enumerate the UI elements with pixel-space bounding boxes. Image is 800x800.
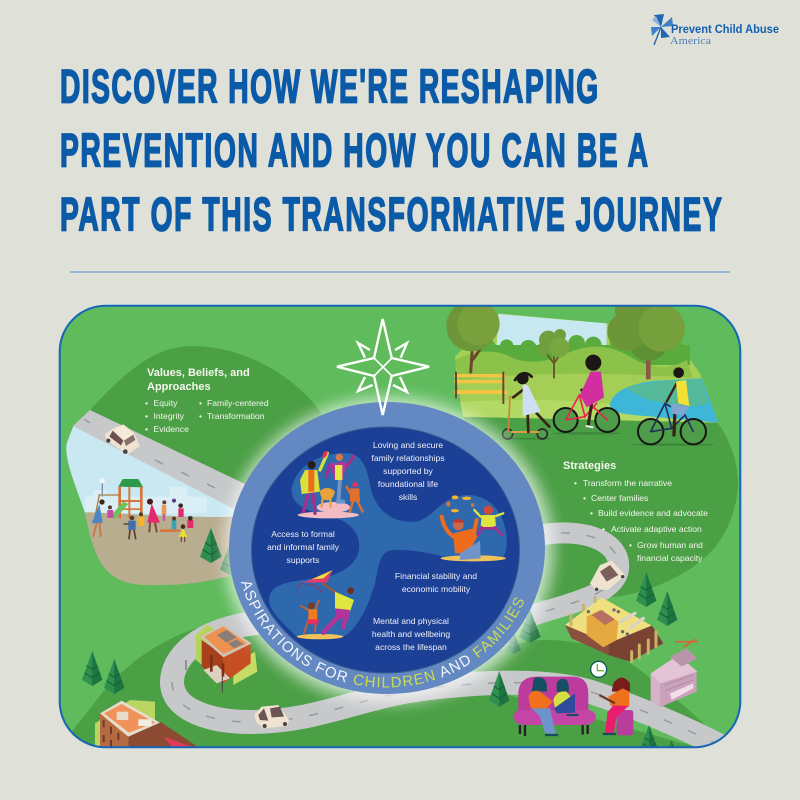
logo: Prevent Child Abuse America: Prevent Child Abuse bbox=[671, 23, 780, 36]
text: values, beliefs, and approaches bbox=[145, 367, 269, 434]
text: values, beliefs, and approaches: Approaches bbox=[147, 381, 211, 393]
icon: compass star bbox=[337, 319, 429, 415]
text: family supports bbox=[267, 529, 340, 565]
text: loving relationships: family relationships bbox=[371, 453, 445, 463]
icon: car on lower road bbox=[254, 705, 289, 728]
text: values, beliefs, and approaches: • bbox=[145, 424, 148, 434]
icon: hospital complex bbox=[565, 597, 663, 662]
inner circle bbox=[252, 427, 520, 673]
pond bbox=[610, 378, 718, 423]
mother and child with leaves bbox=[441, 495, 506, 561]
panel: values blob bbox=[90, 346, 322, 484]
people on sofa bbox=[513, 661, 633, 736]
text: loving relationships: foundational life bbox=[378, 479, 438, 489]
title: PART OF THIS TRANSFORMATIVE JOURNEY bbox=[60, 189, 722, 241]
text: strategies: • bbox=[590, 508, 593, 518]
text: strategies: Transform the narrative bbox=[583, 478, 672, 488]
icon: pinwheel bbox=[651, 14, 673, 45]
girl on scooter bbox=[503, 372, 549, 439]
icon: car on right road bbox=[590, 561, 625, 591]
text: health bbox=[372, 616, 450, 652]
children and adults bbox=[92, 499, 193, 542]
icon: bottom left apartments bbox=[95, 700, 200, 750]
play structure bbox=[95, 478, 143, 519]
panel: journey map bbox=[59, 292, 741, 760]
text: strategies bbox=[563, 460, 708, 563]
icon: pink tower with helicopter bbox=[651, 639, 698, 707]
ground bbox=[85, 512, 233, 585]
panel: lower green hills bbox=[59, 618, 705, 748]
text: family supports: Access to formal bbox=[271, 529, 335, 539]
text: family supports: and informal family bbox=[267, 542, 340, 552]
icon: red civic building bbox=[186, 624, 257, 693]
bushes bbox=[477, 333, 690, 365]
scene: park bbox=[446, 292, 718, 446]
text: health: health and wellbeing bbox=[372, 629, 450, 639]
panel: strategies blob bbox=[463, 417, 738, 600]
outer ring bbox=[229, 402, 545, 694]
woman on pink bike bbox=[554, 355, 619, 432]
text: values, beliefs, and approaches: Evidence bbox=[154, 424, 189, 434]
ring label: ASPIRATIONS FOR CHILDREN AND FAMILIES bbox=[240, 582, 524, 688]
bench bbox=[454, 372, 508, 404]
text: values, beliefs, and approaches: • bbox=[145, 411, 148, 421]
title bbox=[60, 61, 722, 241]
text: financial stability: Financial stability and bbox=[395, 571, 477, 581]
park ground and sky bbox=[455, 313, 718, 423]
trees bbox=[82, 528, 678, 760]
text: strategies: Grow human and bbox=[637, 540, 703, 550]
text: health: Mental and physical bbox=[373, 616, 449, 626]
text: strategies: Strategies bbox=[563, 460, 616, 472]
icon: clock bbox=[591, 661, 607, 677]
woman in orange bbox=[528, 677, 558, 735]
text: loving relationships: Loving and secure bbox=[373, 440, 443, 450]
text: values, beliefs, and approaches: Family-centered bbox=[207, 398, 269, 408]
woman in yellow bbox=[553, 679, 578, 715]
title: PREVENTION AND HOW YOU CAN BE A bbox=[60, 125, 648, 177]
text: values, beliefs, and approaches: • bbox=[199, 398, 202, 408]
text: strategies: Center families bbox=[591, 493, 648, 503]
text: strategies: Build evidence and advocate bbox=[598, 508, 708, 518]
title: DISCOVER HOW WE'RE RESHAPING bbox=[60, 61, 598, 114]
scene: playground bbox=[66, 426, 237, 585]
text: strategies: • bbox=[574, 478, 577, 488]
glow around circle bbox=[225, 398, 553, 702]
woman in pink chair bbox=[599, 677, 633, 735]
text: loving relationships: supported by bbox=[383, 466, 434, 476]
man on dark bike bbox=[638, 367, 706, 444]
logo: Prevent Child Abuse America: America bbox=[670, 36, 712, 47]
sofa bbox=[513, 677, 596, 736]
logo: Prevent Child Abuse America bbox=[651, 14, 780, 47]
kite flyers bbox=[297, 570, 354, 639]
text: health: across the lifespan bbox=[375, 642, 447, 652]
road: lower journey bbox=[172, 533, 740, 756]
text: strategies: • bbox=[629, 540, 632, 550]
road: top left bbox=[73, 410, 245, 510]
text: values, beliefs, and approaches: Transformation bbox=[207, 411, 265, 421]
panel: aspirations circle bbox=[229, 402, 545, 694]
text: strategies: • bbox=[602, 524, 605, 534]
text: values, beliefs, and approaches: Integrity bbox=[154, 411, 185, 421]
trees bbox=[446, 306, 685, 380]
text: loving relationships: skills bbox=[399, 492, 417, 502]
bike shadows bbox=[498, 432, 715, 446]
text: values, beliefs, and approaches: • bbox=[145, 398, 148, 408]
icon: car on top road bbox=[105, 424, 140, 454]
text: financial stability bbox=[395, 571, 477, 594]
text: strategies: Activate adaptive action bbox=[611, 524, 702, 534]
text: strategies: financial capacity bbox=[637, 553, 703, 563]
text: values, beliefs, and approaches: Values, Beliefs, and bbox=[147, 367, 250, 379]
text: values, beliefs, and approaches: • bbox=[199, 411, 202, 421]
text: strategies: • bbox=[583, 493, 586, 503]
text: financial stability: economic mobility bbox=[402, 584, 471, 594]
text: family supports: supports bbox=[287, 555, 319, 565]
text: loving relationships bbox=[371, 440, 445, 502]
text: values, beliefs, and approaches: Equity bbox=[154, 398, 178, 408]
sky bbox=[66, 426, 237, 520]
lighter blue blob bbox=[269, 453, 507, 637]
family with dog bbox=[298, 450, 363, 518]
